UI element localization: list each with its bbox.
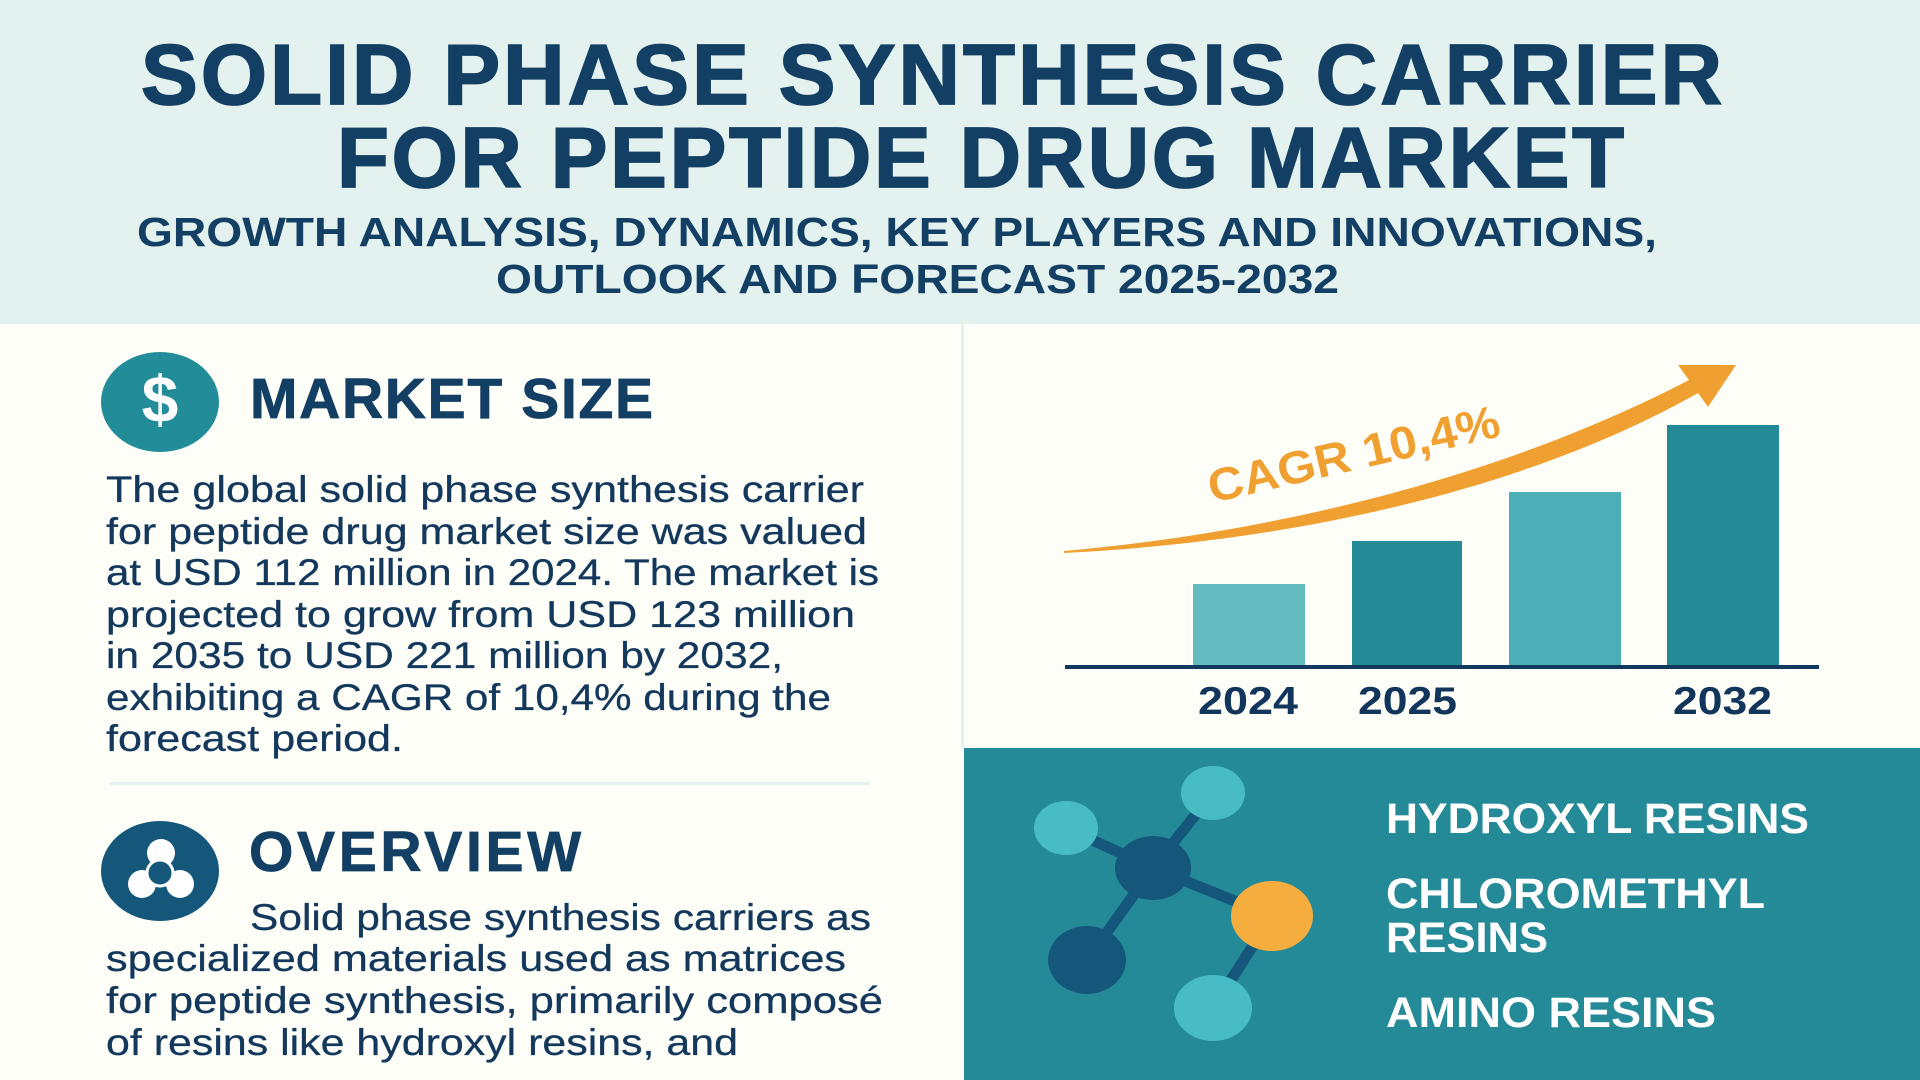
bar: unlabelled (1509, 492, 1621, 666)
icon: dollar (101, 352, 219, 452)
panel: market size (101, 352, 879, 759)
axis labels: 2024 (1198, 680, 1298, 723)
resin list (1386, 795, 1809, 1037)
bar chart (1064, 365, 1819, 723)
text block: overview: of resins like hydroxyl resins, and (106, 1021, 738, 1063)
heading: market size: MARKET SIZE (250, 367, 653, 431)
axis labels (1198, 680, 1772, 723)
title: SOLID PHASE SYNTHESIS CARRIER (141, 28, 1722, 123)
resin list: AMINO RESINS (1386, 989, 1716, 1037)
text block: market size: at USD 112 million in 2024. The market is (106, 551, 879, 593)
label: CAGR: CAGR 10,4% (1203, 395, 1505, 513)
text block: market size: The global solid phase synthesis carrier (106, 468, 864, 510)
icon: dollar: $ (142, 362, 178, 436)
resin list: CHLOROMETHYL (1386, 870, 1765, 918)
title (141, 28, 1722, 206)
icon: molecule badge (101, 821, 219, 921)
bar: 2032 (1667, 425, 1779, 666)
heading: overview: OVERVIEW (249, 820, 581, 884)
panel: resin types (964, 748, 1920, 1080)
text block: market size: forecast period. (106, 717, 403, 759)
arrow: growth trend (1064, 365, 1736, 553)
subtitle: OUTLOOK AND FORECAST 2025-2032 (496, 256, 1339, 302)
axis labels: 2025 (1358, 680, 1457, 723)
text block: overview: specialized materials used as matrices (106, 937, 846, 979)
text block: overview: Solid phase synthesis carriers as (250, 896, 871, 938)
resin list: RESINS (1386, 914, 1548, 962)
text block: market size: projected to grow from USD 123 million (106, 593, 855, 635)
title: FOR PEPTIDE DRUG MARKET (337, 111, 1624, 206)
bar: 2024 (1193, 584, 1305, 666)
axis labels: 2032 (1673, 680, 1772, 723)
text block: market size (106, 468, 879, 759)
text block: market size: for peptide drug market size was valued (106, 510, 867, 552)
panel: header (0, 0, 1920, 324)
text block: market size: in 2035 to USD 221 million by 2032, (106, 634, 783, 676)
text block: market size: exhibiting a CAGR of 10,4% during the (106, 676, 831, 718)
subtitle (137, 209, 1657, 302)
text block: overview (106, 896, 883, 1063)
bar: 2025 (1352, 541, 1462, 666)
text block: overview: for peptide synthesis, primarily composé (106, 979, 883, 1021)
icon: molecule (1034, 766, 1313, 1041)
subtitle: GROWTH ANALYSIS, DYNAMICS, KEY PLAYERS AND INNOVATIONS, (137, 209, 1657, 255)
panel: overview (101, 820, 883, 1063)
resin list: HYDROXYL RESINS (1386, 795, 1809, 843)
